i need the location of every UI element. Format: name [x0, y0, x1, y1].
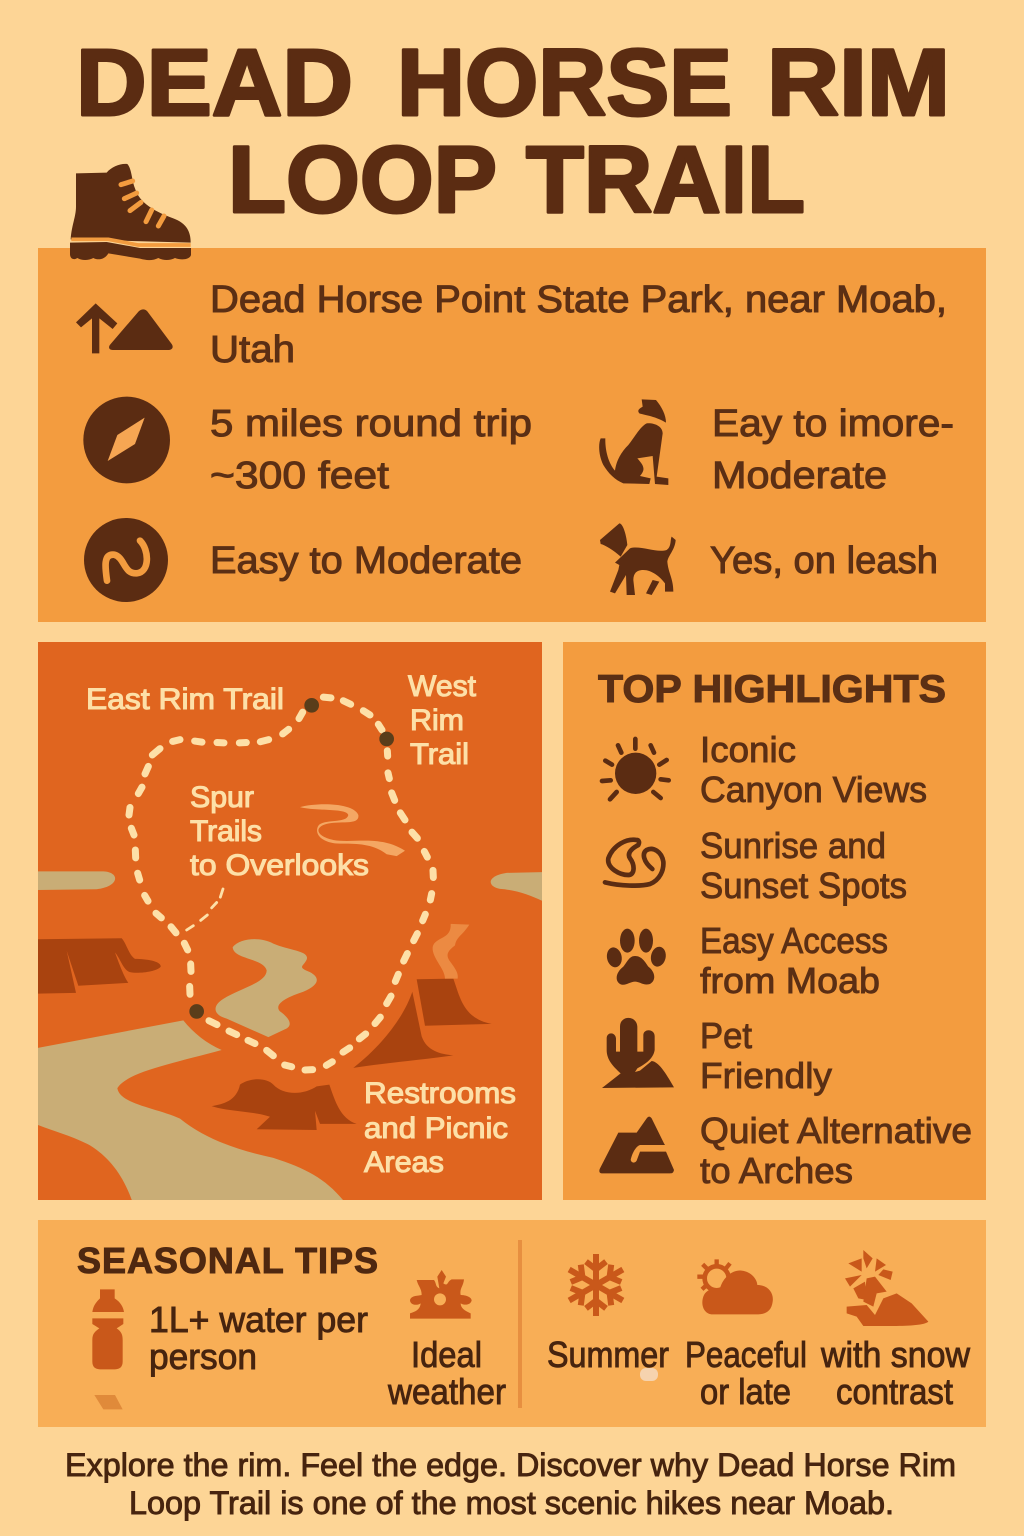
ideal weather text: weather [387, 1371, 506, 1412]
footer tagline: Explore the rim. Feel the edge. Discover why Dead Horse Rim [65, 1447, 956, 1483]
distance and elevation text: 5 miles round trip [210, 403, 532, 445]
icon: sitting dog [599, 399, 668, 485]
highlight: quiet alternative [700, 1110, 972, 1191]
icon: mountain road [599, 1117, 674, 1173]
highlight: canyon views: Canyon Views [700, 769, 927, 810]
dogs text: Yes, on leash [710, 540, 938, 582]
map label: west rim: West [408, 670, 477, 703]
title: TRAIL [526, 127, 805, 233]
icon: ideal weather [410, 1270, 472, 1319]
icon: water bottle [92, 1289, 124, 1409]
highlight: sunrise and sunset: Sunrise and [700, 825, 886, 866]
icon: arrow and mountain [76, 303, 173, 353]
ideal weather text: Ideal [411, 1334, 482, 1375]
icon: sun [602, 739, 669, 799]
highlight: quiet alternative: Quiet Alternative [700, 1110, 972, 1151]
dashed loop trail [129, 697, 433, 1070]
location text: Utah [210, 329, 295, 371]
map label: spur trails [190, 781, 369, 882]
snow contrast text [820, 1334, 971, 1412]
difficulty text: Easy to Moderate [210, 540, 522, 582]
panel: trail facts [38, 248, 986, 622]
icon: dog on leash [600, 523, 676, 595]
icon: paw print [605, 929, 668, 985]
footer tagline: Loop Trail is one of the most scenic hikes near Moab. [129, 1485, 894, 1521]
title: RIM [767, 30, 950, 136]
highlight: sunrise and sunset [700, 825, 907, 906]
icon: snowflake [564, 1254, 628, 1316]
map label: east rim: East Rim Trail [86, 683, 284, 716]
map label: west rim: Trail [410, 738, 469, 771]
icon: winding trail [84, 518, 168, 602]
highlight: pet friendly: Friendly [700, 1055, 832, 1096]
footer tagline [65, 1447, 956, 1521]
title [76, 30, 950, 233]
peaceful text [685, 1334, 807, 1412]
panel: top highlights [563, 642, 986, 1200]
icon: sun and cloud [697, 1259, 773, 1314]
icon: snow and cloud [845, 1250, 928, 1326]
highlight: sunrise and sunset: Sunset Spots [700, 865, 907, 906]
title: LOOP [228, 127, 497, 233]
distance and elevation text: ~300 feet [210, 455, 389, 497]
title: DEAD [76, 30, 353, 136]
icon: canyon swirl [605, 840, 663, 886]
highlight: pet friendly [700, 1015, 832, 1096]
ideal weather text [387, 1334, 506, 1412]
icon: cactus and hill [602, 1018, 674, 1088]
rating text: Moderate [712, 455, 887, 497]
peaceful text: Peaceful [685, 1334, 807, 1375]
water tip text [149, 1299, 368, 1377]
rating text [712, 403, 954, 497]
location text: Dead Horse Point State Park, near Moab, [210, 279, 947, 321]
map label: spur trails: Trails [190, 815, 262, 848]
water tip text: person [149, 1336, 257, 1377]
snow contrast text: contrast [836, 1371, 953, 1412]
seasonal tips heading: SEASONAL TIPS [77, 1240, 378, 1281]
map label: spur trails: Spur [190, 781, 254, 814]
summer text: Summer [547, 1334, 669, 1375]
map label: restrooms: Restrooms [364, 1077, 516, 1110]
peaceful text: or late [700, 1371, 791, 1412]
map label: restrooms [364, 1077, 516, 1179]
map label: restrooms: and Picnic [364, 1112, 508, 1145]
highlight: access from Moab: Easy Access [700, 920, 888, 961]
highlight: canyon views [700, 729, 927, 810]
distance and elevation text [210, 403, 532, 497]
snow contrast text: with snow [820, 1334, 971, 1375]
highlight: quiet alternative: to Arches [700, 1150, 853, 1191]
map label: spur trails: to Overlooks [190, 849, 369, 882]
highlight: access from Moab [700, 920, 888, 1001]
map terrain [38, 804, 542, 1202]
water tip text: 1L+ water per [149, 1299, 368, 1340]
highlight: access from Moab: from Moab [700, 960, 880, 1001]
panel: trail map [38, 642, 542, 1202]
highlight: pet friendly: Pet [700, 1015, 752, 1056]
highlights heading: TOP HIGHLIGHTS [598, 668, 946, 711]
location text [210, 279, 947, 371]
map label: west rim [408, 670, 477, 771]
highlight: canyon views: Iconic [700, 729, 796, 770]
title: HORSE [397, 30, 732, 136]
icon: compass [83, 397, 170, 483]
icon: hiking boot [70, 164, 191, 260]
panel: seasonal tips [38, 1220, 986, 1427]
map label: restrooms: Areas [364, 1146, 444, 1179]
rating text: Eay to imore- [712, 403, 954, 445]
map label: west rim: Rim [410, 704, 464, 737]
